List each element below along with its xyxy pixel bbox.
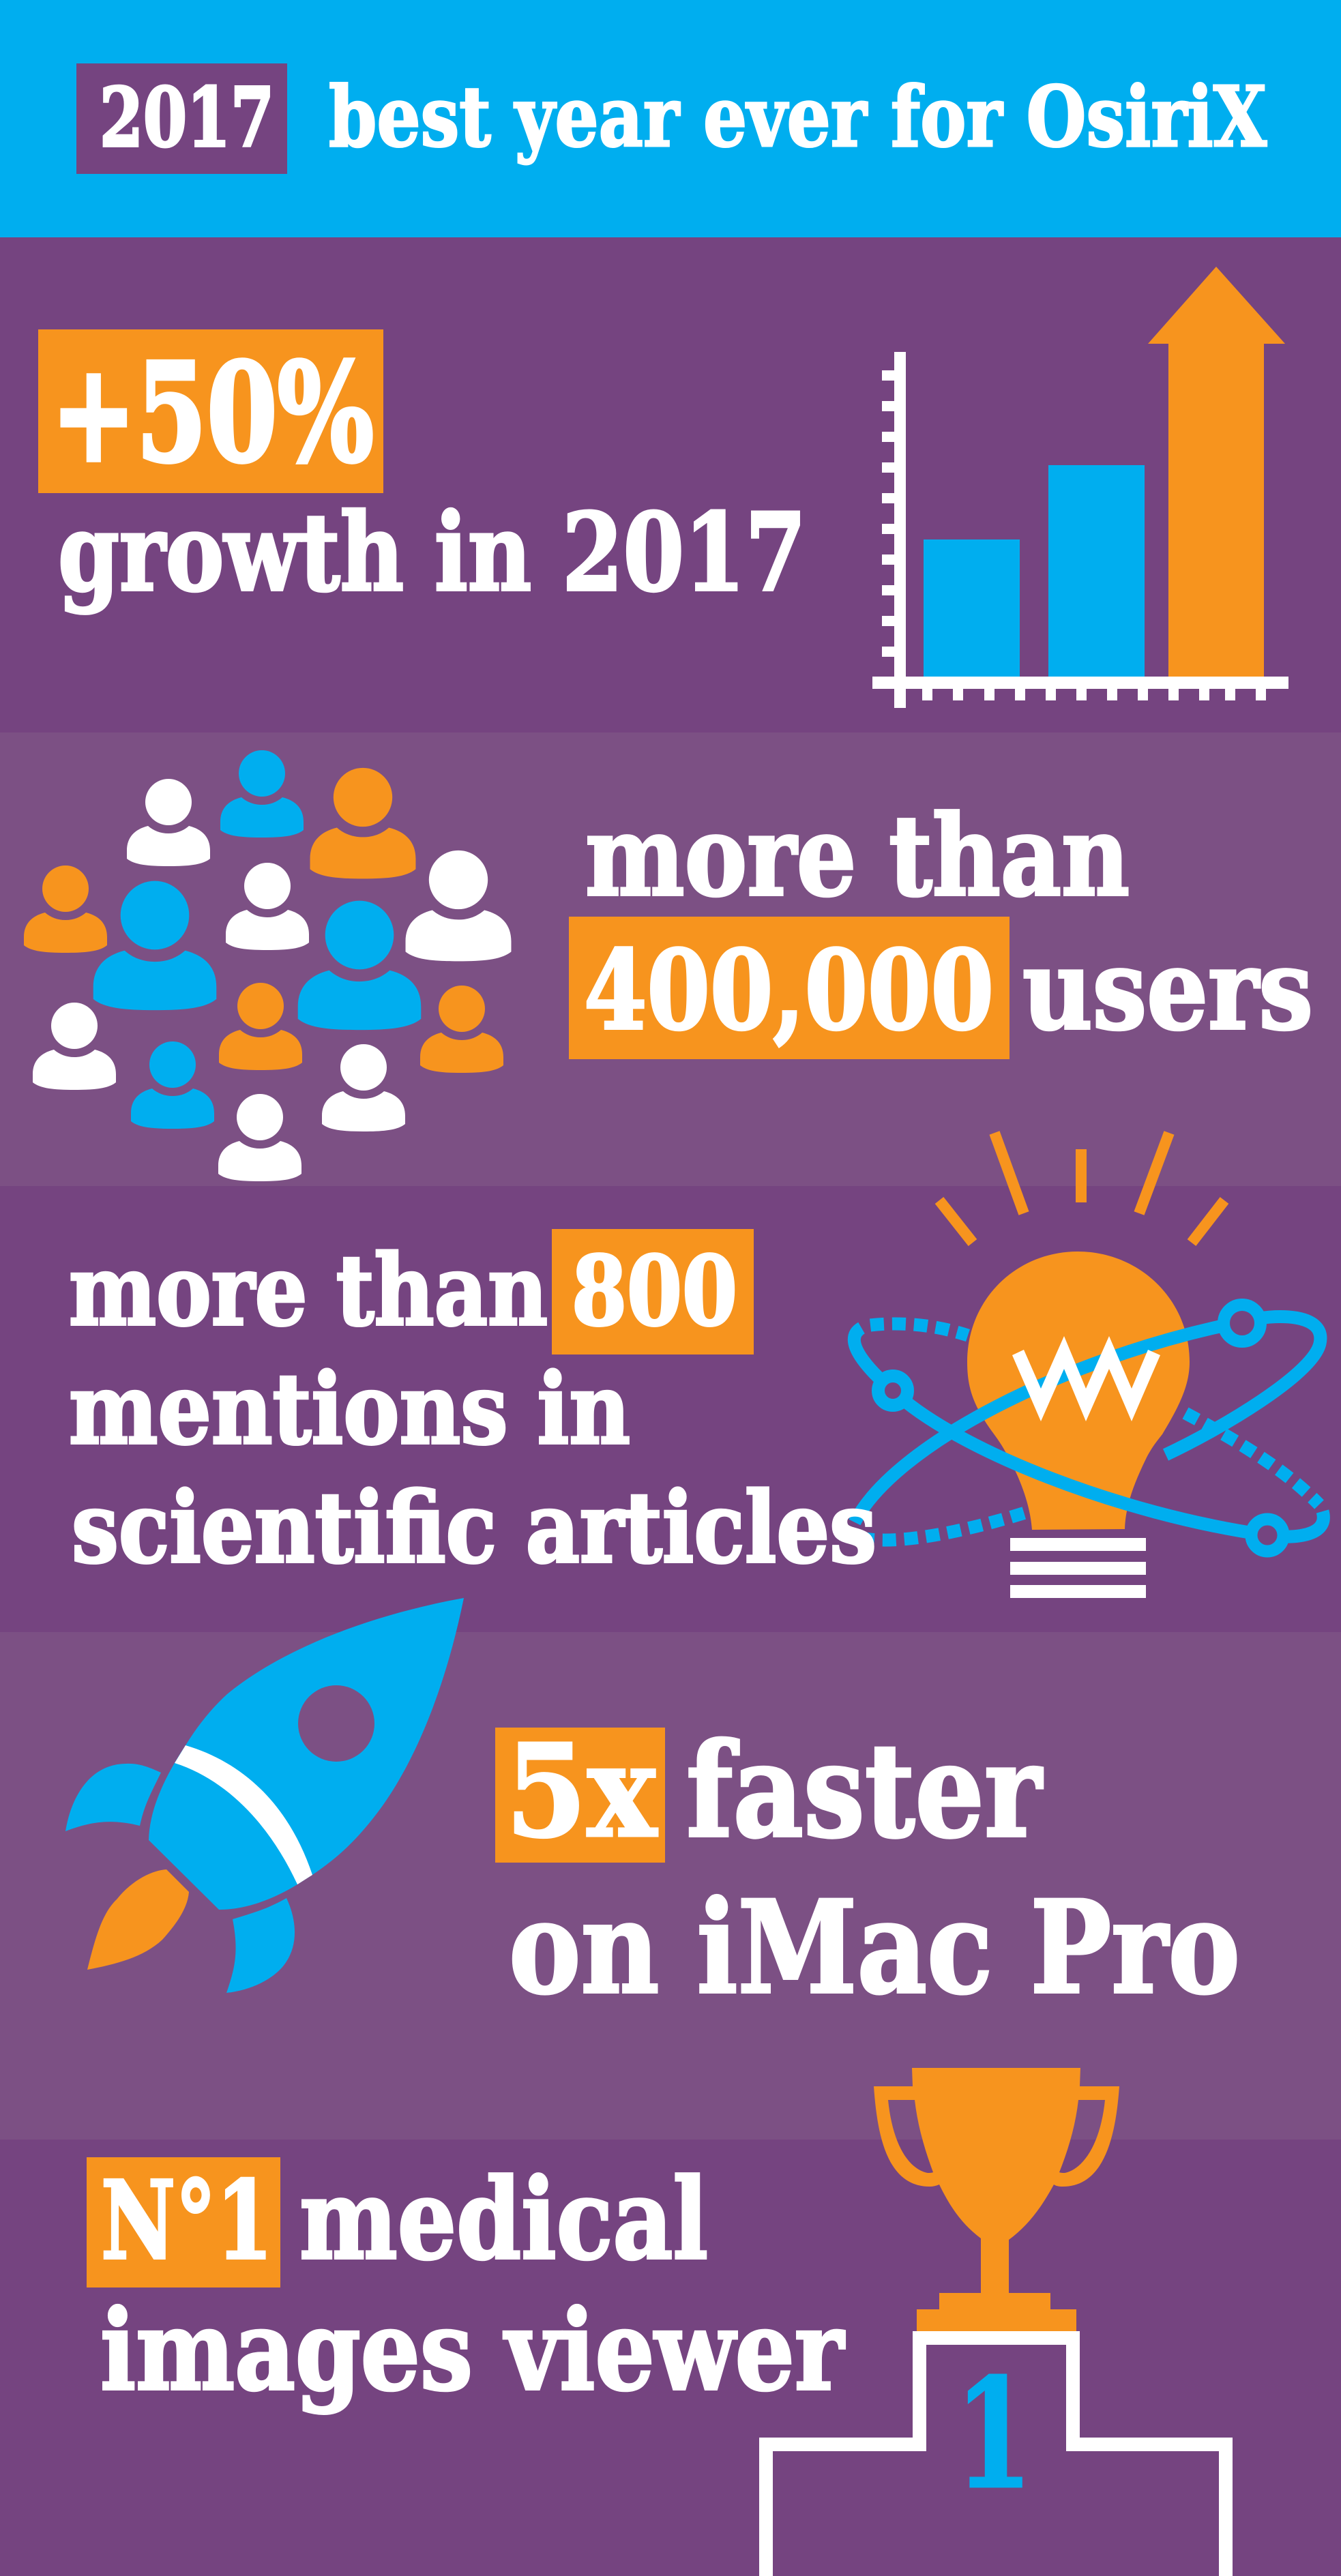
year badge [76, 63, 287, 174]
speed text line 1: faster [686, 1715, 1043, 1867]
icon: light bulb with orbits [854, 1133, 1323, 1598]
users heading: more than [585, 791, 1130, 921]
ranking text line 2: images viewer [100, 2286, 845, 2416]
growth text: growth in 2017 [58, 490, 806, 616]
mentions text line 1: more than [69, 1233, 548, 1348]
mentions badge: 800 [572, 1236, 737, 1348]
podium: 1 [955, 2345, 1033, 2523]
panel: mentions [0, 1133, 1341, 1632]
ranking text line 1: medical [299, 2155, 708, 2285]
users badge: 400,000 [584, 926, 994, 1054]
ranking badge: N°1 [101, 2158, 273, 2284]
growth badge: +50% [51, 333, 374, 492]
icon: crowd of people [24, 750, 511, 1181]
panel: users [0, 732, 1341, 1186]
podium [766, 2338, 1226, 2576]
panel: speed [0, 1598, 1341, 2140]
year badge: 2017 [100, 70, 274, 166]
icon: rocket [65, 1598, 464, 1993]
bar chart [872, 267, 1288, 708]
icon: trophy [874, 2068, 1119, 2332]
speed badge: 5x [505, 1716, 658, 1867]
mentions text line 2: mentions in [69, 1352, 630, 1466]
header panel [0, 0, 1341, 237]
mentions text line 3: scientific articles [72, 1470, 876, 1585]
panel: ranking [0, 2068, 1341, 2576]
panel: growth [0, 237, 1341, 732]
